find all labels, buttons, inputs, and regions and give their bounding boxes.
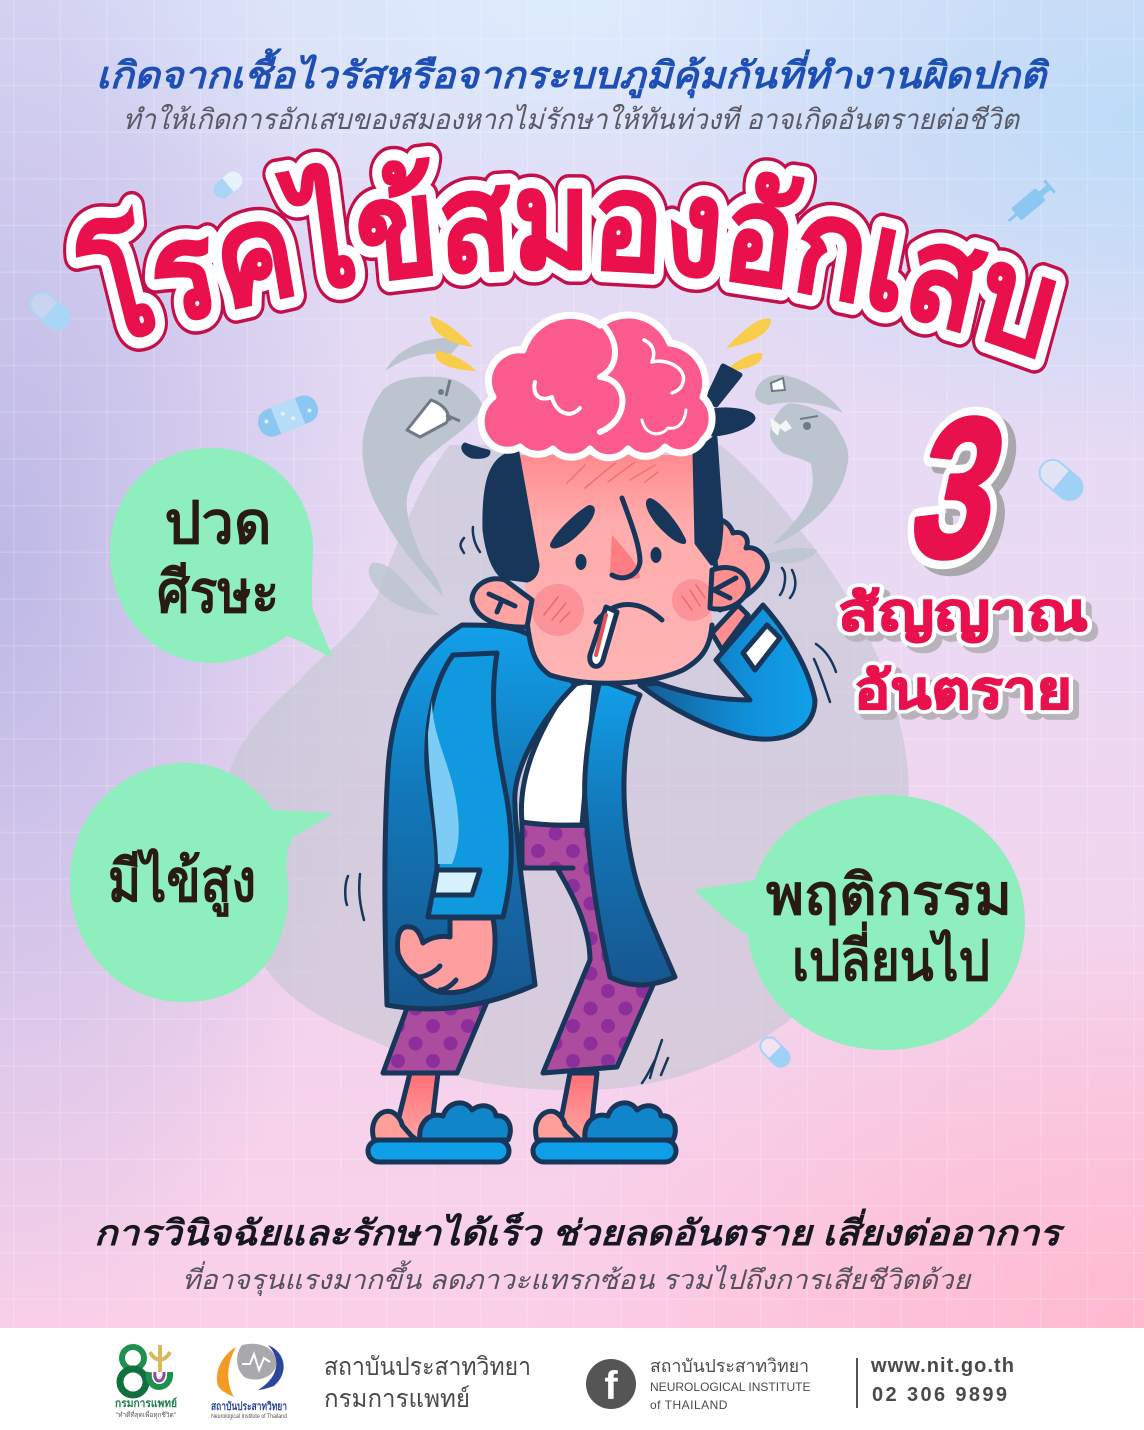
- number 3: 3: [896, 378, 1022, 599]
- label line 1: สัญญาณ: [844, 590, 1094, 649]
- title: curved: โรคไข้สมองอักเสบ: [63, 142, 1069, 374]
- speech bubble: behaviour change: [695, 795, 1025, 1050]
- arm sleeve: [640, 605, 815, 739]
- thermometer: [590, 607, 617, 666]
- background blob behind character: [228, 445, 909, 1090]
- logo: Neurological Institute: Neurological Institute of Thailand: [211, 1414, 287, 1420]
- header text: [96, 48, 1050, 135]
- logo: Neurological Institute: [211, 1344, 287, 1420]
- decorative medical icons: [25, 168, 1088, 1070]
- contact details: www.nit.go.th: [870, 1355, 1014, 1377]
- sub-headline: ทำให้เกิดการอักเสบของสมองหากไม่รักษาให้ทันท่วงที อาจเกิดอันตรายต่อชีวิต: [123, 103, 1021, 135]
- head: [518, 455, 712, 683]
- speech bubble: headache: ปวด: [164, 491, 272, 556]
- mouth: [596, 604, 662, 622]
- speech bubble: headache: ศีรษะ: [157, 560, 279, 625]
- forehead sweat lines: [567, 462, 658, 488]
- callout: 3 danger signs: [838, 378, 1094, 726]
- brain: [481, 315, 712, 458]
- label line 2: อันตราย: [854, 662, 1072, 720]
- logo: 80 years Department of Medical Services: "ทำดีที่สุดเพื่อทุกชีวิต": [116, 1410, 177, 1419]
- speech bubble: behaviour change: เปลี่ยนไป: [792, 921, 990, 992]
- speech bubble: fever: มีไข้สูง: [108, 848, 256, 917]
- logo: 80 years Department of Medical Services: กรมการแพทย์: [115, 1397, 177, 1410]
- label line 2: อันตราย: [860, 668, 1078, 726]
- icon: syringe: [1003, 180, 1056, 227]
- wrist and fingers behind ear: [712, 605, 748, 650]
- bottom message: [94, 1208, 1066, 1297]
- organisation name: สถาบันประสาทวิทยา: [324, 1353, 531, 1381]
- organisation name: [324, 1353, 531, 1413]
- icon: pill right: [1034, 455, 1088, 505]
- speech bubble: fever: [70, 763, 333, 1002]
- label line 1: สัญญาณ: [838, 584, 1088, 643]
- ghost right: [755, 375, 848, 563]
- label line 1: สัญญาณ: [838, 584, 1088, 643]
- coat sleeve: [427, 653, 511, 917]
- coat pocket: [433, 870, 480, 895]
- character: sick man: [345, 315, 836, 1162]
- sleeve highlight: [428, 700, 459, 864]
- facebook page name: สถาบันประสาทวิทยา: [650, 1356, 809, 1376]
- facebook page name: of THAILAND: [650, 1398, 728, 1412]
- icon: pill bottom: [757, 1034, 793, 1070]
- icon: pill left: [25, 288, 75, 334]
- headline: cause: เกิดจากเชื้อไวรัสหรือจากระบบภูมิคุ้มกันที่ทำงานผิดปกติ: [96, 48, 1050, 99]
- label line 1: [838, 584, 1094, 649]
- coat right side: [585, 680, 675, 985]
- number 3: 3: [896, 378, 1022, 599]
- icon: facebook: f: [604, 1364, 618, 1408]
- speech bubble: behaviour change: พฤติกรรม: [766, 863, 1012, 926]
- logo: 80 years Department of Medical Services: [115, 1345, 177, 1419]
- facebook page name: [650, 1356, 811, 1412]
- pyjama trousers: [383, 822, 653, 1073]
- icon: bandage: [254, 391, 322, 441]
- speech bubble: headache: [110, 448, 333, 663]
- organisation name: กรมการแพทย์: [324, 1385, 470, 1413]
- shake lines: [345, 527, 836, 1083]
- slippers: [368, 1103, 676, 1162]
- icon: pill top left: [210, 168, 246, 202]
- bottom message: ที่อาจรุนแรงมากขึ้น ลดภาวะแทรกซ้อน รวมไปถึงการเสียชีวิตด้วย: [182, 1260, 972, 1297]
- logo: Neurological Institute: สถาบันประสาทวิทยา: [211, 1400, 287, 1413]
- facebook page name: NEUROLOGICAL INSTITUTE: [650, 1380, 811, 1394]
- icon: facebook: [586, 1359, 636, 1409]
- hair: [485, 453, 537, 580]
- footer band: [0, 1328, 1144, 1430]
- eyebrows: [550, 498, 686, 570]
- contact details: 02 306 9899: [872, 1384, 1007, 1406]
- coat left side: [385, 625, 575, 1009]
- label line 2: อันตราย: [854, 662, 1072, 720]
- bottom message: การวินิจฉัยและรักษาได้เร็ว ช่วยลดอันตราย เสี่ยงต่ออาการ: [94, 1208, 1066, 1253]
- ghost left: [362, 337, 483, 615]
- right ear: [710, 568, 748, 609]
- cheeks: [532, 579, 714, 636]
- contact details: [870, 1355, 1014, 1406]
- number 3: 3: [904, 385, 1030, 606]
- nose: [612, 498, 640, 578]
- left hand: [398, 918, 495, 993]
- white shirt: [521, 680, 595, 825]
- yellow flashes: [430, 316, 771, 372]
- left ear: [472, 579, 532, 627]
- nose flush: [610, 535, 640, 580]
- cuff: [743, 625, 780, 670]
- title: curved: โรคไข้สมองอักเสบ: [66, 146, 1066, 370]
- legs: [397, 1073, 597, 1140]
- title: curved: โรคไข้สมองอักเสบ: [76, 156, 1056, 360]
